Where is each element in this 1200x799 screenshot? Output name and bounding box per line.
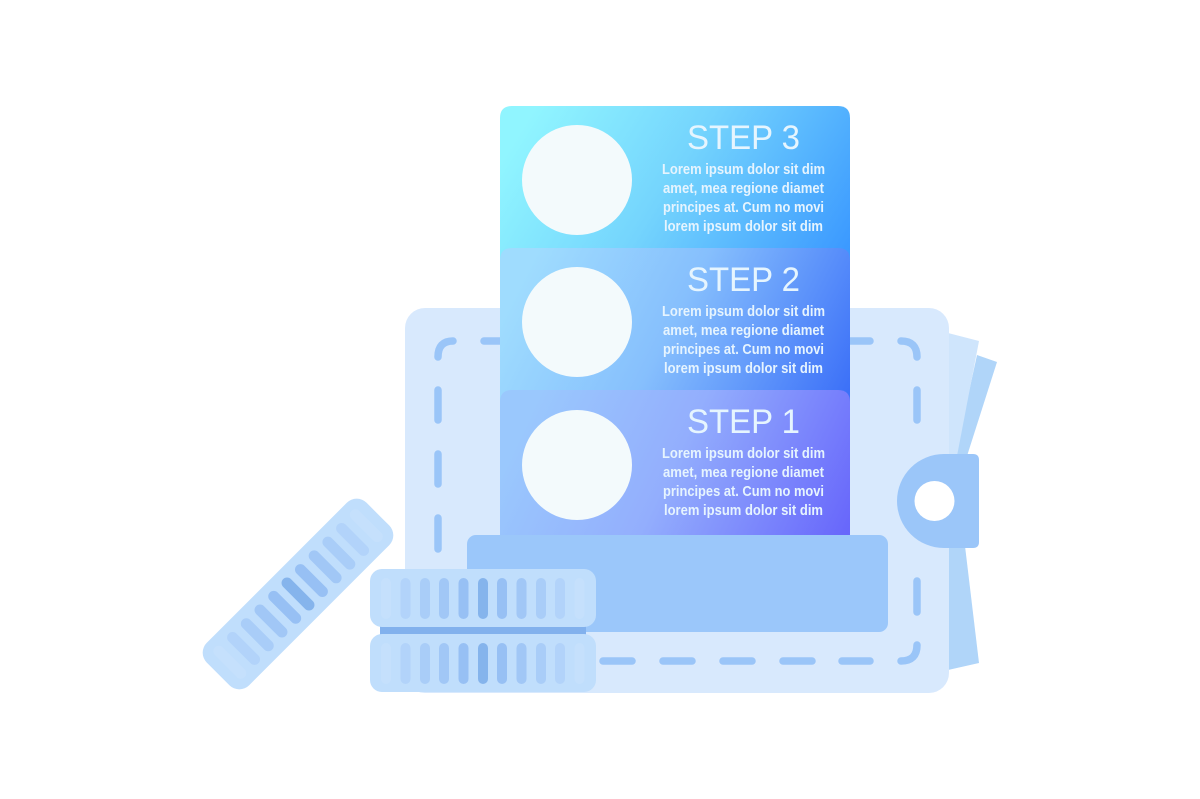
text block: step 2: amet, mea regione diamet: [663, 323, 824, 339]
text block: step 1: [662, 446, 825, 519]
text block: step 1: lorem ipsum dolor sit dim: [664, 503, 823, 519]
text block: step 2: lorem ipsum dolor sit dim: [664, 361, 823, 377]
coin: lower: [370, 634, 596, 692]
text block: step 3: amet, mea regione diamet: [663, 181, 824, 197]
text block: step 2: [662, 304, 825, 377]
icon placeholder: step 1 circle: [522, 410, 632, 520]
panel: step 3: [500, 106, 850, 262]
coin: upper: [370, 569, 596, 627]
wallet pocket: [467, 535, 888, 632]
wallet stitching: [438, 341, 917, 661]
text block: step 3: [662, 162, 825, 235]
wallet body: [405, 308, 949, 693]
text block: step 1: Lorem ipsum dolor sit dim: [662, 446, 825, 462]
banknotes behind wallet: [948, 333, 997, 670]
coin: tilted: [197, 493, 399, 695]
heading: step 1: STEP 1: [687, 403, 800, 441]
icon placeholder: step 3 circle: [522, 125, 632, 235]
text block: step 1: principes at. Cum no movi: [663, 484, 824, 500]
icon placeholder: step 2 circle: [522, 267, 632, 377]
heading: step 3: STEP 3: [687, 119, 800, 157]
text block: step 2: Lorem ipsum dolor sit dim: [662, 304, 825, 320]
text block: step 3: lorem ipsum dolor sit dim: [664, 219, 823, 235]
text block: step 3: principes at. Cum no movi: [663, 200, 824, 216]
heading: step 2: STEP 2: [687, 261, 800, 299]
panel: step 2: [500, 248, 850, 404]
wallet clasp: [897, 454, 979, 548]
text block: step 2: principes at. Cum no movi: [663, 342, 824, 358]
panel: step 1: [500, 390, 850, 537]
text block: step 3: Lorem ipsum dolor sit dim: [662, 162, 825, 178]
text block: step 1: amet, mea regione diamet: [663, 465, 824, 481]
coin stack: [370, 569, 596, 692]
